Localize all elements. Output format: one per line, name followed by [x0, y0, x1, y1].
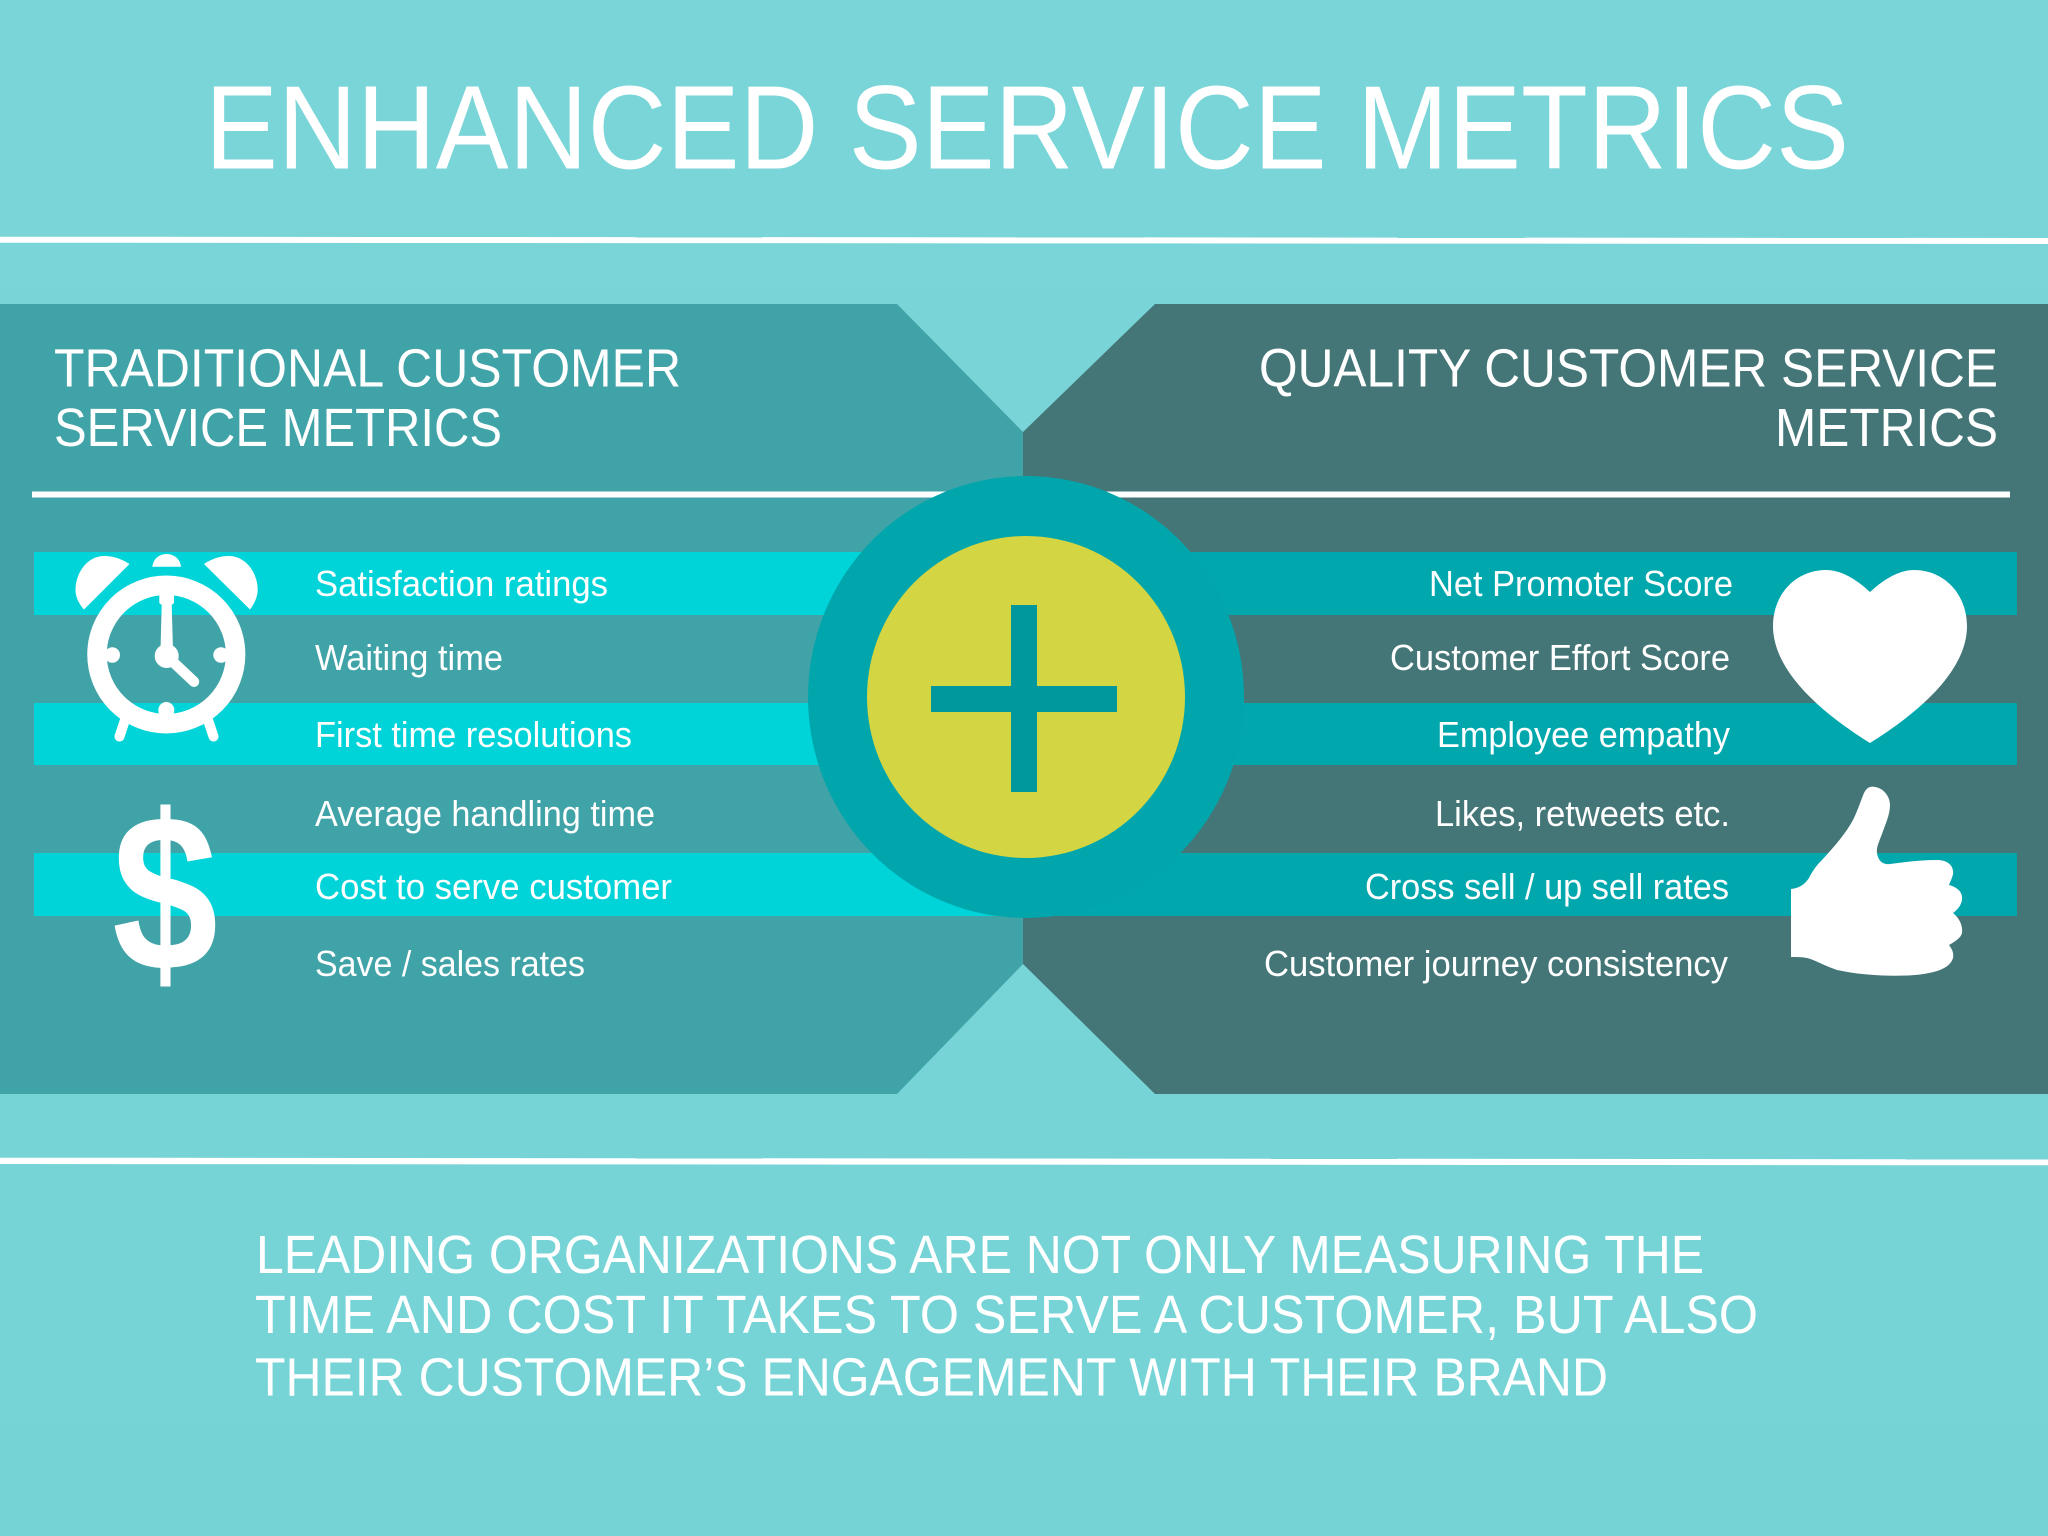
- list: quality metrics: Net Promoter Score: [1429, 563, 1733, 604]
- plus badge: [808, 476, 1244, 918]
- list: quality metrics: Likes, retweets etc.: [1435, 793, 1730, 834]
- list: traditional metrics: [315, 563, 672, 984]
- list: quality metrics: Employee empathy: [1437, 714, 1730, 755]
- left stripes: [34, 552, 1023, 916]
- list: quality metrics: Customer Effort Score: [1390, 637, 1730, 678]
- heading: traditional customer service metrics: [54, 340, 681, 458]
- closing statement: LEADING ORGANIZATIONS ARE NOT ONLY MEASURING THE: [256, 1226, 1704, 1285]
- list: quality metrics: Cross sell / up sell rates: [1365, 866, 1729, 907]
- list: traditional metrics: Average handling time: [315, 793, 655, 834]
- closing statement: THEIR CUSTOMER’S ENGAGEMENT WITH THEIR BRAND: [255, 1348, 1608, 1408]
- panel: quality metrics background: [1023, 304, 2048, 1094]
- heading: quality customer service metrics: METRICS: [1775, 399, 1998, 458]
- closing statement: TIME AND COST IT TAKES TO SERVE A CUSTOMER, BUT ALSO: [255, 1286, 1758, 1345]
- title: ENHANCED SERVICE METRICS: [205, 62, 1849, 194]
- icon: thumbs up: [1791, 787, 1962, 976]
- list: traditional metrics: Satisfaction ratings: [315, 563, 608, 604]
- list: traditional metrics: First time resolutions: [315, 714, 632, 755]
- closing statement: [255, 1226, 1758, 1408]
- list: traditional metrics: Save / sales rates: [315, 943, 585, 984]
- list: traditional metrics: Cost to serve customer: [315, 866, 672, 907]
- panel: traditional metrics background: [0, 304, 1023, 1094]
- heading: quality customer service metrics: [1259, 340, 1998, 458]
- right stripes: [1023, 552, 2017, 916]
- heading: traditional customer service metrics: TRADITIONAL CUSTOMER: [54, 340, 681, 398]
- list: quality metrics: Customer journey consistency: [1264, 943, 1728, 984]
- icon: alarm clock: [76, 554, 258, 736]
- icon: dollar sign: $: [112, 768, 218, 1017]
- list: traditional metrics: Waiting time: [315, 637, 503, 678]
- list: quality metrics: [1264, 563, 1733, 984]
- icon: heart: [1773, 570, 1967, 743]
- heading: quality customer service metrics: QUALITY CUSTOMER SERVICE: [1259, 340, 1998, 398]
- heading: traditional customer service metrics: SERVICE METRICS: [54, 399, 502, 458]
